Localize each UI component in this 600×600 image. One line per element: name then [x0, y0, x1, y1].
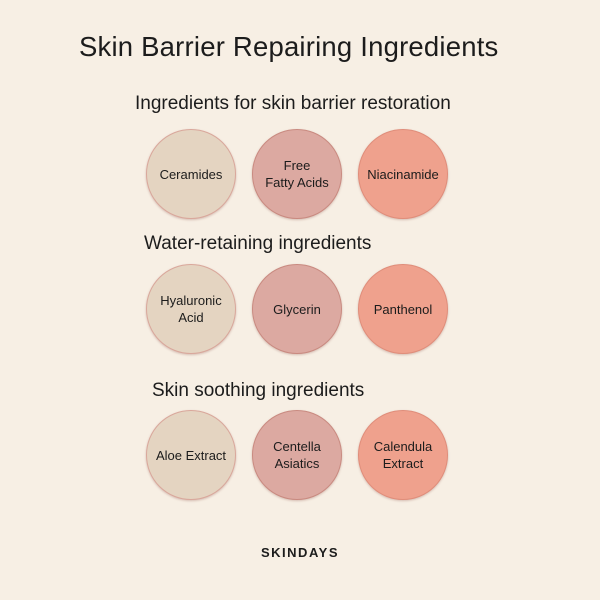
row: restoration circles [145, 129, 449, 221]
circle: Aloe Extract: Aloe Extract [156, 448, 226, 462]
circle: Glycerin [252, 264, 342, 354]
circle: Calendula Extract [358, 410, 448, 500]
circle: Hyaluronic Acid: Hyaluronic [160, 293, 222, 308]
circle: Hyaluronic Acid: Acid [178, 310, 204, 325]
circle: Calendula Extract: Extract [383, 456, 423, 471]
circle: Free Fatty Acids: Fatty Acids [265, 175, 329, 190]
circle: Ceramides: Ceramides [160, 166, 222, 182]
circle: Aloe Extract [146, 410, 236, 500]
circle: Hyaluronic Acid [146, 264, 236, 354]
heading: water-retaining: Water-retaining ingredients [144, 233, 371, 254]
title: Skin Barrier Repairing Ingredients [79, 31, 499, 62]
row: water-retaining circles [145, 264, 449, 356]
circle: Free Fatty Acids: Free [284, 158, 310, 173]
row: soothing circles [145, 410, 449, 502]
circle: Centella Asiatics [252, 410, 342, 500]
circle: Calendula Extract: Calendula [374, 439, 432, 454]
circle: Niacinamide: Niacinamide [367, 166, 439, 182]
circle: Centella Asiatics: Centella [273, 439, 321, 454]
circle: Ceramides [146, 129, 236, 219]
circle: Panthenol [358, 264, 448, 354]
circle: Glycerin: Glycerin [273, 302, 321, 316]
heading: restoration: Ingredients for skin barrier restoration [135, 93, 451, 114]
brand logo: SKINDAYS [261, 545, 339, 560]
circle: Free Fatty Acids [252, 129, 342, 219]
circle: Niacinamide [358, 129, 448, 219]
circle: Centella Asiatics: Asiatics [275, 456, 319, 471]
heading: soothing: Skin soothing ingredients [152, 380, 364, 401]
circle: Panthenol: Panthenol [374, 302, 432, 316]
